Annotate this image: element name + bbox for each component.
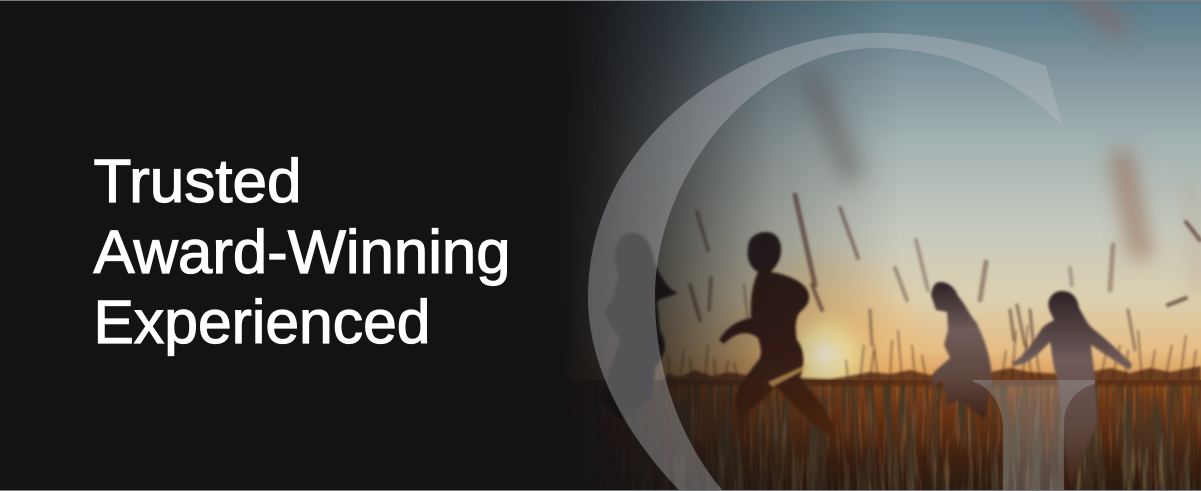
logo watermark: letter T serif [973, 380, 1095, 491]
sky [540, 0, 1201, 382]
field [540, 380, 1201, 491]
heading line: Experienced: Experienced [94, 288, 430, 356]
heading line: Award-Winning: Award-Winning [94, 218, 510, 286]
heading line: Trusted: Trusted [94, 147, 302, 215]
figure: girl with flowing hair [600, 233, 678, 420]
blurred foreground stalks [815, 0, 1201, 290]
grass stalks along horizon [668, 325, 1196, 380]
field texture: dark [540, 380, 1201, 491]
photo: children running in a field at sunset [540, 0, 1201, 491]
sun glow [690, 240, 970, 382]
sun flare [768, 365, 808, 387]
figure: girl with arms out [1012, 291, 1132, 490]
figure: running boy [719, 232, 838, 440]
figure: girl with braid [930, 282, 992, 420]
heading [94, 147, 510, 356]
grass fringe at horizon [660, 366, 1201, 386]
field texture: light [540, 380, 1201, 491]
logo watermark: letter C [588, 33, 1063, 491]
wheat heads [690, 195, 1200, 350]
dark fade over photo [530, 0, 900, 491]
